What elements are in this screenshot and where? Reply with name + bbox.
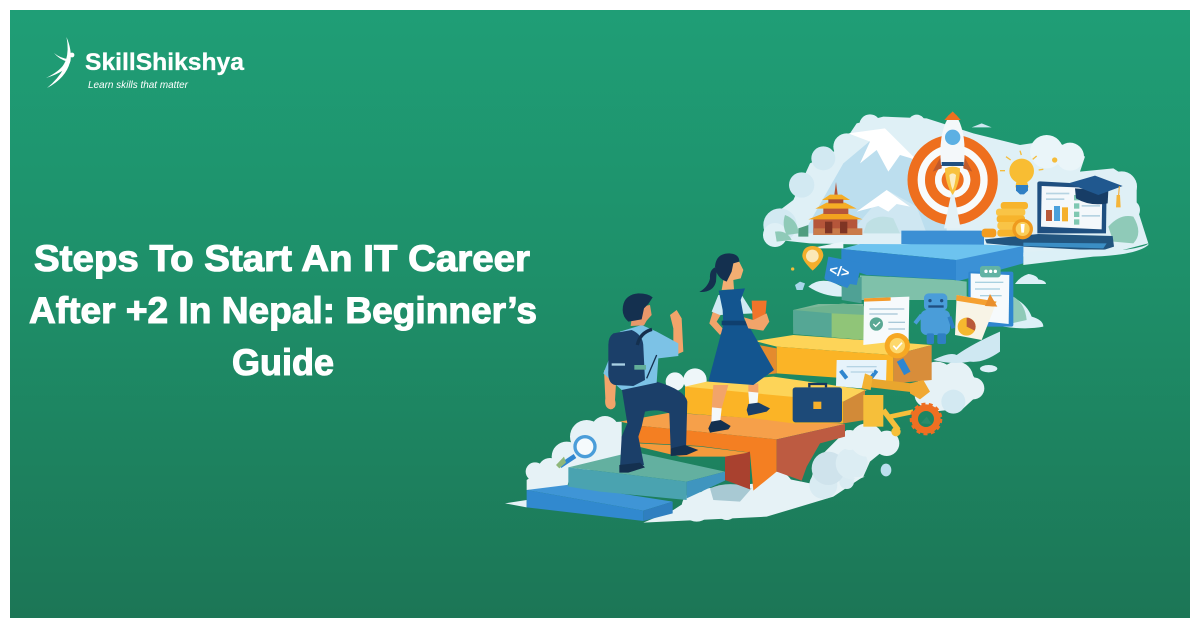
back leg xyxy=(712,385,728,422)
teal step xyxy=(568,452,725,500)
title xyxy=(29,238,537,383)
trousers xyxy=(620,382,687,467)
laptop xyxy=(985,181,1114,251)
cloud backdrop xyxy=(763,114,1148,257)
briefcase xyxy=(793,384,842,422)
wisp under chart document xyxy=(933,332,1000,363)
coins xyxy=(982,202,1033,239)
backpack xyxy=(608,330,645,386)
back shoe xyxy=(619,463,645,473)
blue top step xyxy=(901,231,984,248)
green step xyxy=(793,303,867,340)
sleeves xyxy=(712,295,753,315)
yellow upper step xyxy=(755,335,932,383)
clipboard xyxy=(968,266,1013,327)
backpack details xyxy=(612,363,646,370)
cross strap xyxy=(647,355,657,378)
illustration: upper scene xyxy=(763,112,1148,340)
foliage xyxy=(775,215,1138,243)
left cloud xyxy=(505,416,622,507)
target rings xyxy=(913,140,993,228)
title: Guide xyxy=(232,342,334,383)
blue middle step xyxy=(841,244,1023,282)
logo xyxy=(46,37,244,91)
magnifying glass badge xyxy=(885,333,910,373)
document with check xyxy=(863,297,909,345)
left arm xyxy=(709,310,724,335)
blue bottom step xyxy=(527,485,673,521)
icon: code tag: </> xyxy=(828,261,851,281)
shoulder strap xyxy=(637,329,652,345)
graduation cap xyxy=(1068,176,1123,207)
cloud wisps xyxy=(795,243,1148,328)
orange step xyxy=(620,413,845,491)
rocket xyxy=(933,112,972,195)
magnifying glass xyxy=(556,437,595,468)
forearm xyxy=(744,313,769,331)
chart document xyxy=(955,294,997,340)
girl climbing xyxy=(699,253,774,433)
brand name: SkillShikshya xyxy=(85,49,244,76)
yellow lower step xyxy=(685,377,867,423)
illustration: lower scene xyxy=(505,253,1000,523)
pagoda xyxy=(808,182,863,235)
title: After +2 In Nepal: Beginner’s xyxy=(29,290,537,331)
hair top xyxy=(715,253,739,282)
shirt xyxy=(603,325,678,390)
foliage near clipboard xyxy=(1012,297,1027,323)
left arm xyxy=(604,370,616,409)
raised arm xyxy=(670,310,683,356)
small green step xyxy=(793,304,863,340)
front leg xyxy=(748,383,758,393)
bottom clouds xyxy=(643,423,899,523)
boy climbing xyxy=(603,293,698,473)
girl shoes xyxy=(708,420,731,433)
certificate card xyxy=(836,360,887,388)
robot xyxy=(915,293,953,344)
front shoe xyxy=(671,445,698,456)
icon: leaping figure xyxy=(46,37,74,88)
tools and gear xyxy=(862,373,941,436)
neck and face xyxy=(631,305,652,326)
mountains xyxy=(803,128,947,233)
socks xyxy=(711,407,722,423)
light bulb xyxy=(1000,151,1057,194)
dress xyxy=(708,288,774,385)
tagline: Learn skills that matter xyxy=(88,79,188,91)
cloud behind girl xyxy=(666,368,707,392)
icon: map pin xyxy=(791,246,823,271)
right cloud xyxy=(915,362,984,414)
hair xyxy=(623,293,653,322)
clouds xyxy=(505,332,1000,523)
title: Steps To Start An IT Career xyxy=(34,238,530,279)
ponytail xyxy=(699,267,717,292)
book xyxy=(752,301,767,321)
upper green step xyxy=(842,275,967,303)
icon: code tag xyxy=(824,257,861,288)
neck and face xyxy=(722,257,743,290)
